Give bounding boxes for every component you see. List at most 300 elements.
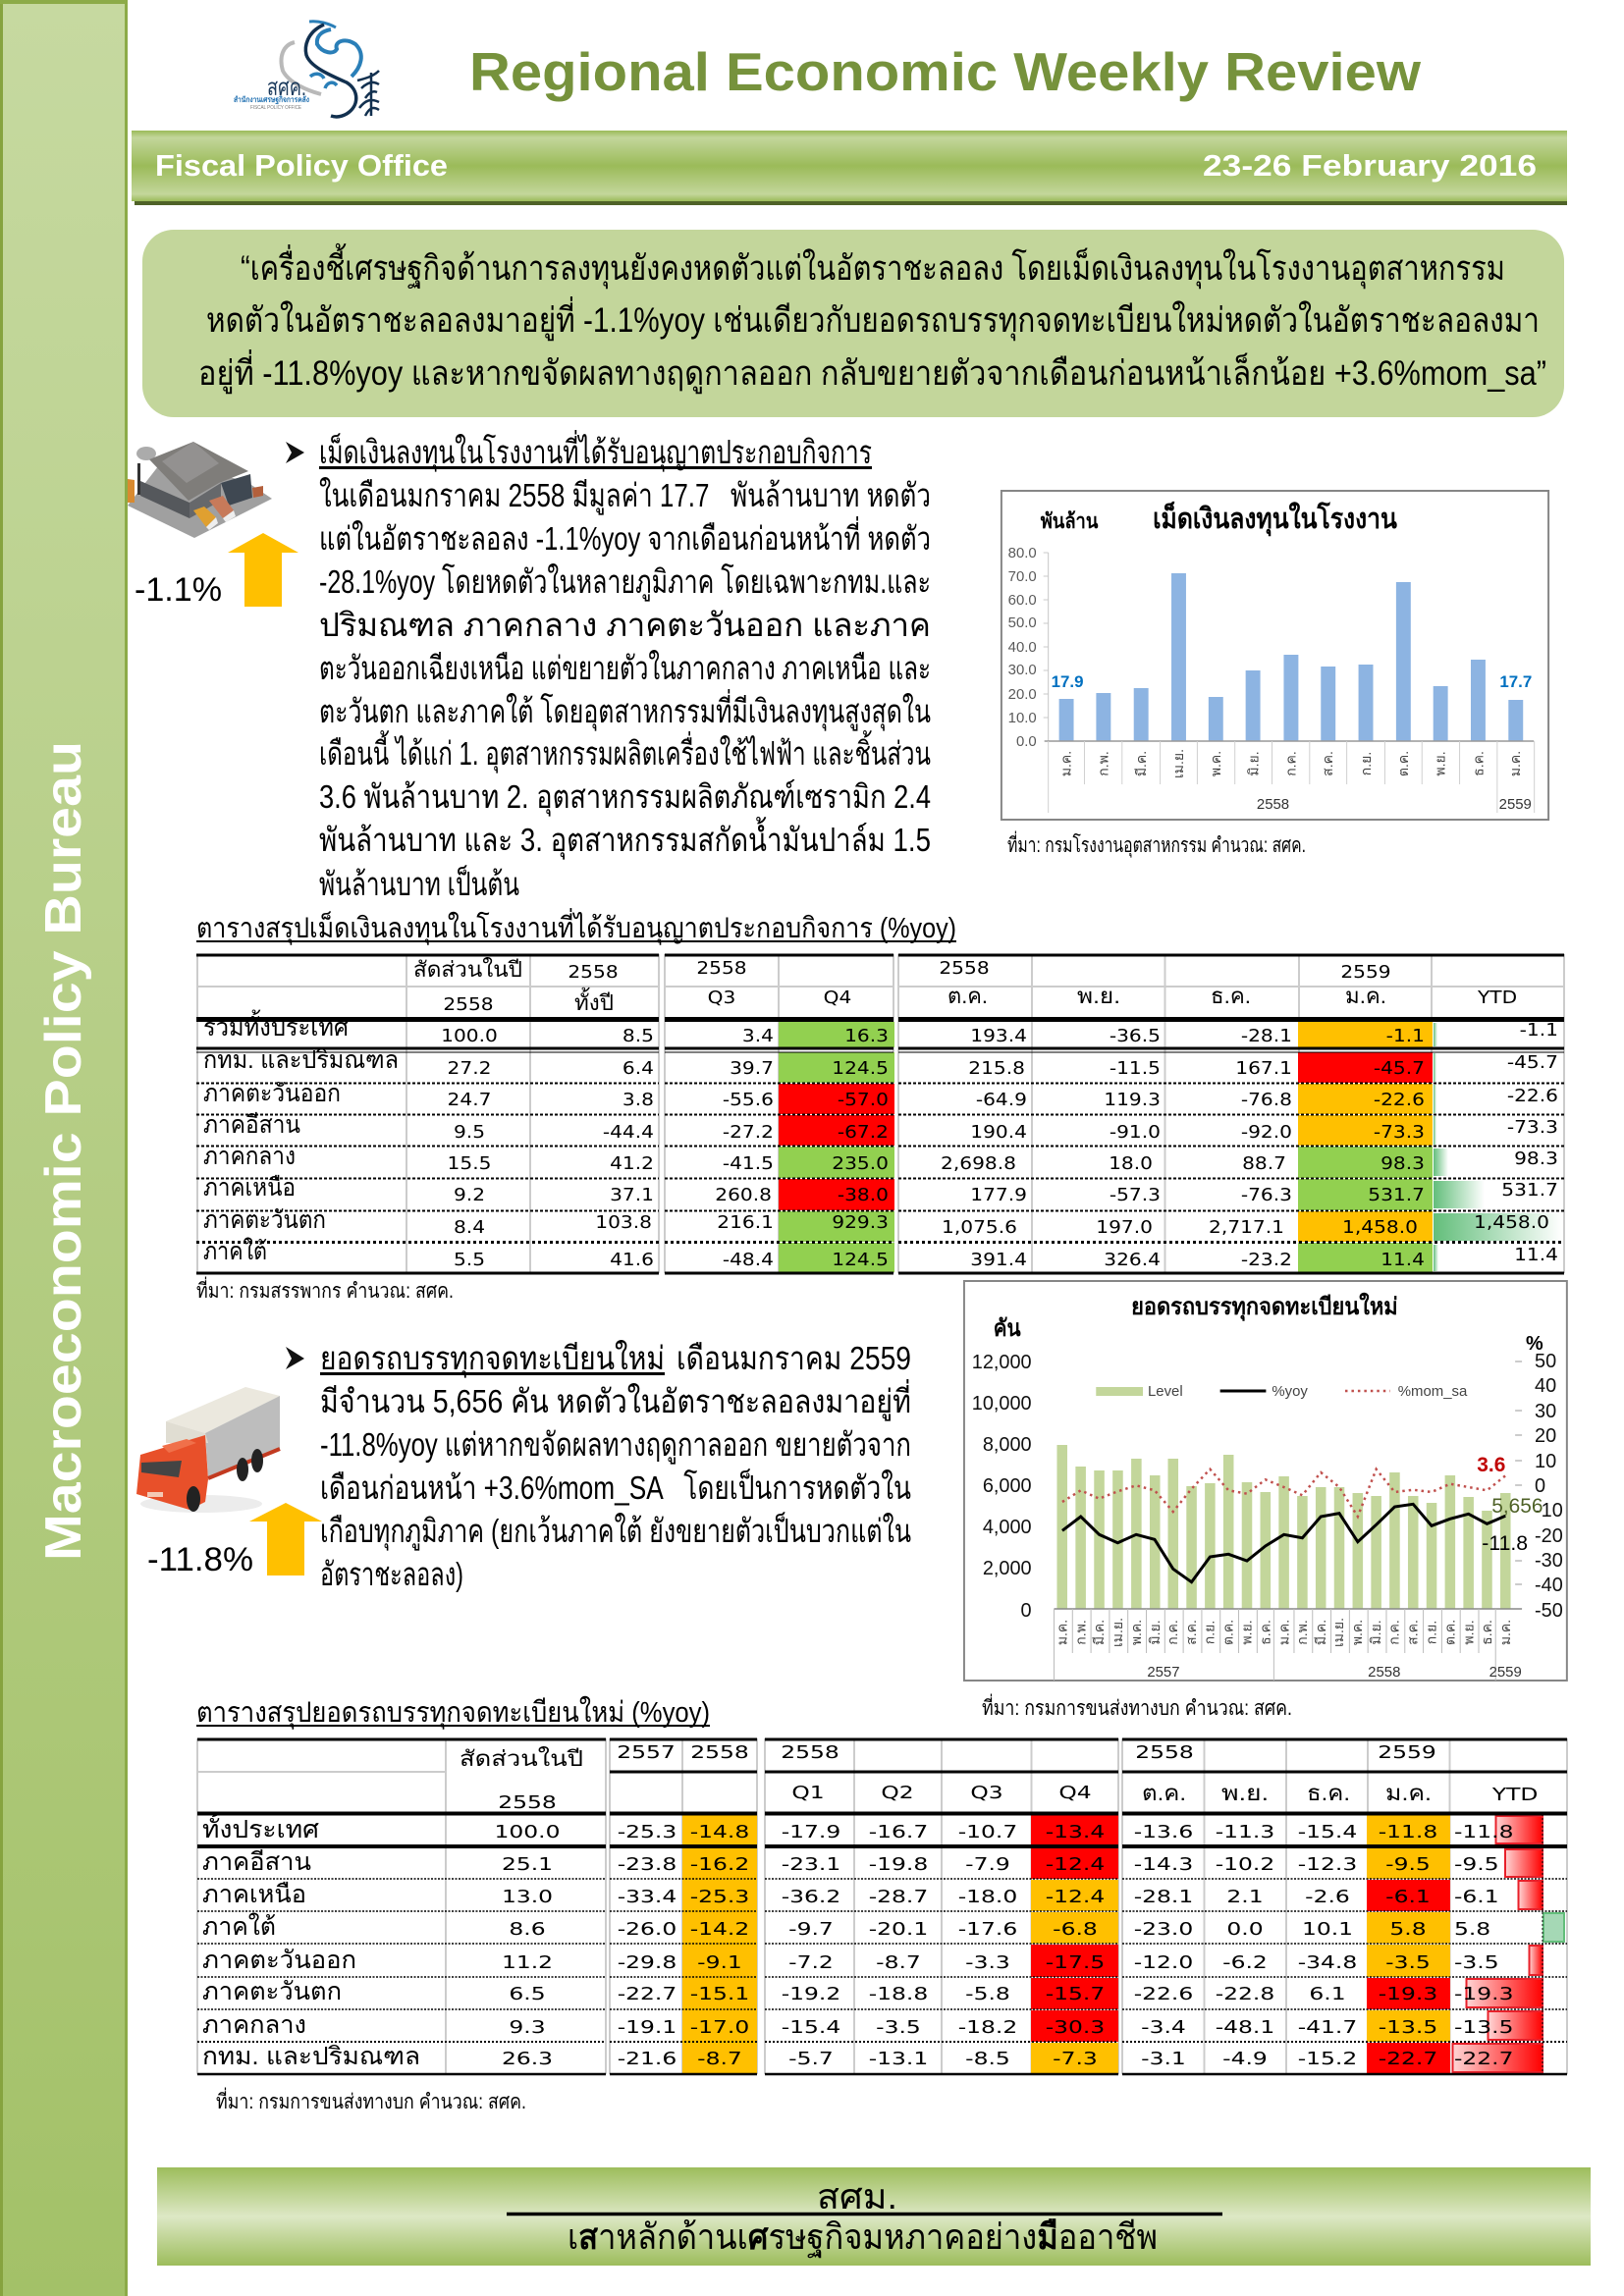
row: Central: 41.2 bbox=[610, 1152, 654, 1174]
row: West: 1,075.6 bbox=[942, 1216, 1017, 1238]
row: whole country: 3.4 bbox=[742, 1025, 774, 1046]
row: Central: -30.3 bbox=[1046, 2017, 1105, 2037]
row: South bbox=[203, 1237, 1558, 1270]
table 2 header: Q3 bbox=[970, 1783, 1003, 1802]
text: factory investment: พันล้านบาท และ 3. อุตสาหกรรมสกัดน้ำมันปาล์ม 1.5 bbox=[319, 817, 931, 860]
row: Central: -17.0 bbox=[690, 2017, 749, 2037]
row: whole country: 100.0 bbox=[441, 1025, 498, 1046]
table 2 header: 2558 bbox=[1135, 1742, 1194, 1762]
left axis: 8,000 bbox=[983, 1434, 1032, 1456]
row: West: 1,458.0 bbox=[1342, 1216, 1418, 1238]
row: whole country: ทั้งประเทศ bbox=[202, 1811, 319, 1843]
row: East: -3.3 bbox=[965, 1952, 1010, 1972]
x axis: ส.ค. bbox=[1320, 751, 1335, 776]
unit label: พันล้าน bbox=[1041, 509, 1099, 533]
y axis bbox=[1008, 545, 1049, 750]
x axis: ม.ค. bbox=[1497, 1620, 1513, 1645]
row: Central: -15.4 bbox=[782, 2017, 840, 2037]
row: Bangkok: -13.1 bbox=[869, 2049, 928, 2068]
x axis: ธ.ค. bbox=[1479, 1620, 1494, 1645]
date: 23-26 February 2016 bbox=[1203, 148, 1537, 183]
x axis: ก.พ. bbox=[1095, 751, 1110, 776]
row: Bangkok: -8.7 bbox=[697, 2049, 742, 2068]
row: Northeast: -9.5 bbox=[1385, 1854, 1431, 1874]
row: whole country: 16.3 bbox=[844, 1025, 889, 1046]
text: factory investment: 3.6 พันล้านบาท 2. อุตสาหกรรมผลิตภัณฑ์เซรามิก 2.4 bbox=[319, 778, 931, 817]
row: East: -3.5 bbox=[1385, 1952, 1431, 1972]
row: North bbox=[202, 1881, 1499, 1908]
table 1 header: Q3 bbox=[708, 987, 735, 1008]
row: West: -22.8 bbox=[1216, 1984, 1274, 2003]
y axis: 40.0 bbox=[1008, 639, 1037, 656]
x axis: พ.ย. bbox=[1239, 1620, 1254, 1645]
x axis: ม.ค. bbox=[1054, 1620, 1069, 1645]
table 2 header: 2558 bbox=[498, 1792, 557, 1812]
x axis: ก.ย. bbox=[1424, 1621, 1439, 1644]
table 2 header: 2557 bbox=[617, 1742, 676, 1762]
x axis: 2557 bbox=[1147, 1664, 1180, 1681]
row: West: 6.5 bbox=[509, 1984, 546, 2003]
row: Central: -3.5 bbox=[876, 2017, 921, 2037]
table 1 header: 2558 bbox=[568, 961, 619, 983]
row: East: -9.1 bbox=[697, 1952, 742, 1972]
x axis: ธ.ค. bbox=[1257, 1620, 1272, 1645]
right axis: 0 bbox=[1535, 1475, 1545, 1497]
row: East: -76.8 bbox=[1241, 1089, 1292, 1110]
row: Central: ภาคกลาง bbox=[203, 1143, 296, 1170]
row: North: -28.1 bbox=[1134, 1887, 1193, 1906]
row: whole country: -1.1 bbox=[1520, 1019, 1558, 1041]
row: Northeast: -91.0 bbox=[1110, 1121, 1161, 1143]
row: East: -12.0 bbox=[1134, 1952, 1193, 1972]
row: Northeast: ภาคอีสาน bbox=[203, 1111, 300, 1139]
table 1 header: สัดส่วนในปี bbox=[413, 957, 522, 982]
row: South: 5.8 bbox=[1389, 1919, 1427, 1939]
line: mom_sa bbox=[1062, 1469, 1505, 1517]
sidebar: Macroeconomic Policy Bureau bbox=[35, 741, 92, 1561]
text: factory investment bbox=[286, 430, 931, 902]
table 2 header: 2558 bbox=[781, 1742, 839, 1762]
row: East: -64.9 bbox=[976, 1089, 1027, 1110]
row: Bangkok: -7.3 bbox=[1053, 2049, 1098, 2068]
row: whole country: -28.1 bbox=[1241, 1025, 1292, 1046]
x axis: ธ.ค. bbox=[1470, 751, 1486, 776]
annotation: 5,656: 5,656 bbox=[1491, 1495, 1543, 1518]
row: Bangkok: -15.2 bbox=[1298, 2049, 1357, 2068]
row: East: 119.3 bbox=[1104, 1089, 1161, 1110]
row: Central bbox=[202, 2011, 1514, 2039]
x axis: เม.ย. bbox=[1330, 1618, 1346, 1647]
left unit: คัน bbox=[994, 1315, 1021, 1342]
x axis: ก.พ. bbox=[1072, 1620, 1088, 1645]
row: South: -14.2 bbox=[690, 1919, 749, 1939]
row: South: 326.4 bbox=[1104, 1249, 1161, 1270]
row: Bangkok: 39.7 bbox=[730, 1057, 774, 1079]
row: West: 197.0 bbox=[1096, 1216, 1153, 1238]
row: whole country: 100.0 bbox=[495, 1822, 560, 1842]
text: new truck registration: เกือบทุกภูมิภาค (ยกเว้นภาคใต้ ยังขยายตัวเป็นบวกแต่ใน bbox=[320, 1512, 911, 1551]
row: West bbox=[202, 1978, 1514, 2005]
chart title: ยอดรถบรรทุกจดทะเบียนใหม่ bbox=[1131, 1292, 1398, 1321]
row: whole country: -15.4 bbox=[1298, 1822, 1357, 1842]
table 1 header: 2558 bbox=[939, 957, 990, 979]
row: West: -22.7 bbox=[618, 1984, 677, 2003]
table 2: new truck registration bbox=[197, 1738, 1567, 2074]
table 2 header: ต.ค. bbox=[1142, 1781, 1186, 1805]
row: Bangkok bbox=[202, 2043, 1514, 2070]
row: South: -6.8 bbox=[1053, 1919, 1098, 1939]
x axis: 2559 bbox=[1499, 796, 1532, 813]
table 2 header: 2559 bbox=[1378, 1742, 1436, 1762]
right axis: -50 bbox=[1535, 1600, 1563, 1622]
row: South: -20.1 bbox=[869, 1919, 928, 1939]
row: South: -23.0 bbox=[1134, 1919, 1193, 1939]
x axis: 2558 bbox=[1368, 1664, 1400, 1681]
source: chart 2: ที่มา: กรมการขนส่งทางบก คำนวณ: สศค. bbox=[982, 1693, 1292, 1720]
row: North: -6.1 bbox=[1454, 1887, 1499, 1906]
x axis: ก.ค. bbox=[1386, 1620, 1402, 1645]
row: South: 8.6 bbox=[509, 1919, 546, 1939]
row: Bangkok: 6.4 bbox=[623, 1057, 654, 1079]
row: whole country: รวมทั้งประเทศ bbox=[203, 1009, 349, 1041]
left axis: 10,000 bbox=[972, 1393, 1032, 1415]
row: West: ภาคตะวันตก bbox=[203, 1206, 326, 1234]
value: -11.8%: -11.8% bbox=[147, 1541, 253, 1578]
text: factory investment: แต่ในอัตราชะลอลง -1.1%yoy จากเดือนก่อนหน้าที่ หดตัว bbox=[319, 516, 931, 557]
row: East bbox=[202, 1947, 1499, 1974]
x axis: เม.ย. bbox=[1170, 749, 1186, 778]
row: Northeast: ภาคอีสาน bbox=[202, 1848, 311, 1876]
text: new truck registration: -11.8%yoy แต่หากขจัดผลทางฤดูกาลออก ขยายตัวจาก bbox=[320, 1426, 911, 1465]
icon: factory bbox=[128, 442, 272, 538]
x axis: 2559 bbox=[1489, 1664, 1522, 1681]
text: factory investment: พันล้านบาท เป็นต้น bbox=[319, 865, 519, 902]
row: Bangkok: 124.5 bbox=[832, 1057, 889, 1079]
bars: level bbox=[1056, 1445, 1511, 1609]
row: Northeast: -44.4 bbox=[603, 1121, 654, 1143]
row: East: -8.7 bbox=[876, 1952, 921, 1972]
row: North: 260.8 bbox=[715, 1184, 772, 1205]
row: West: -19.2 bbox=[782, 1984, 840, 2003]
row: Bangkok: -45.7 bbox=[1374, 1057, 1425, 1079]
row: whole country: -1.1 bbox=[1386, 1025, 1425, 1046]
data label: 17.9: 17.9 bbox=[1052, 672, 1084, 691]
row: East: 3.8 bbox=[623, 1089, 654, 1110]
x axis: พ.ย. bbox=[1433, 751, 1448, 776]
row: Northeast: -9.5 bbox=[1454, 1854, 1499, 1874]
row: South: 391.4 bbox=[970, 1249, 1027, 1270]
row: whole country: -11.8 bbox=[1454, 1822, 1514, 1842]
x axis: พ.ค. bbox=[1128, 1620, 1144, 1645]
x axis: มิ.ย. bbox=[1147, 1620, 1163, 1645]
table 1 header: พ.ย. bbox=[1077, 984, 1120, 1008]
row: Bangkok: -22.7 bbox=[1454, 2049, 1514, 2068]
y axis: 50.0 bbox=[1008, 614, 1037, 631]
text: factory investment: ในเดือนมกราคม 2558 มีมูลค่า 17.7 พันล้านบาท หดตัว bbox=[319, 477, 931, 515]
YTD data bars bbox=[1434, 1023, 1562, 1271]
table 2 header bbox=[460, 1742, 1538, 1812]
row: East bbox=[203, 1080, 1558, 1110]
row: North: -12.4 bbox=[1046, 1887, 1105, 1906]
row: Central: -13.5 bbox=[1379, 2017, 1437, 2037]
row: South: -26.0 bbox=[618, 1919, 677, 1939]
row: West: 216.1 bbox=[717, 1211, 774, 1233]
title: Regional Economic Weekly Review bbox=[469, 41, 1421, 102]
text: new truck registration: มีจำนวน 5,656 คัน หดตัวในอัตราชะลอลงมาอยู่ที่ bbox=[320, 1379, 911, 1421]
row: South: 10.1 bbox=[1302, 1919, 1353, 1939]
x axis: ต.ค. bbox=[1395, 751, 1411, 776]
arrow: investment up bbox=[228, 533, 298, 607]
row: Central: 98.3 bbox=[1380, 1152, 1425, 1174]
row: South: 41.6 bbox=[610, 1249, 654, 1270]
row: whole country: -25.3 bbox=[618, 1822, 677, 1842]
right axis bbox=[1515, 1351, 1563, 1622]
row: East: -22.6 bbox=[1507, 1085, 1558, 1106]
right axis: 50 bbox=[1535, 1351, 1556, 1372]
row: Northeast: -7.9 bbox=[965, 1854, 1010, 1874]
row: West: ภาคตะวันตก bbox=[202, 1978, 342, 2005]
row: Northeast: -73.3 bbox=[1374, 1121, 1425, 1143]
x axis: พ.ย. bbox=[1460, 1620, 1476, 1645]
x axis: ม.ค. bbox=[1507, 751, 1523, 776]
x axis: 2558 bbox=[1257, 796, 1289, 813]
row: whole country: 193.4 bbox=[970, 1025, 1027, 1046]
row: Bangkok: -11.5 bbox=[1110, 1057, 1161, 1079]
table 1 header: YTD bbox=[1477, 987, 1517, 1008]
text: new truck registration: ยอดรถบรรทุกจดทะเบียนใหม่ bbox=[320, 1340, 665, 1378]
x axis: ส.ค. bbox=[1183, 1620, 1199, 1645]
row: Northeast bbox=[202, 1848, 1499, 1876]
x axis: ม.ค. bbox=[1058, 751, 1074, 776]
row: Bangkok: 167.1 bbox=[1235, 1057, 1292, 1079]
row: Central: -19.1 bbox=[618, 2017, 677, 2037]
table 2 header: Q4 bbox=[1058, 1783, 1092, 1802]
x axis: มิ.ย. bbox=[1246, 751, 1262, 776]
row: South: ภาคใต้ bbox=[202, 1912, 276, 1941]
table 2 header: YTD bbox=[1491, 1785, 1538, 1804]
row: Northeast: -12.3 bbox=[1298, 1854, 1357, 1874]
row: Bangkok: -4.9 bbox=[1222, 2049, 1268, 2068]
table 1 header: ต.ค. bbox=[947, 984, 988, 1008]
x axis: มี.ค. bbox=[1133, 751, 1149, 776]
row: Central: 9.3 bbox=[509, 2017, 546, 2037]
row: North bbox=[203, 1174, 1558, 1205]
row: East: -34.8 bbox=[1298, 1952, 1357, 1972]
row: North: 9.2 bbox=[454, 1184, 485, 1205]
table 1 header: ทั้งปี bbox=[574, 988, 614, 1015]
row: Central bbox=[203, 1143, 1558, 1174]
row: Bangkok: -3.1 bbox=[1141, 2049, 1186, 2068]
right unit: % bbox=[1526, 1333, 1543, 1355]
x axis: พ.ค. bbox=[1208, 751, 1223, 776]
right axis: 30 bbox=[1535, 1401, 1556, 1422]
text: new truck registration: เดือนมกราคม 2559 bbox=[677, 1340, 911, 1376]
x axis: ต.ค. bbox=[1220, 1620, 1236, 1645]
footer abbreviation: สศม. bbox=[817, 2176, 897, 2216]
annotation: -11.8: -11.8 bbox=[1482, 1532, 1528, 1555]
row: South bbox=[202, 1912, 1490, 1941]
y axis: 70.0 bbox=[1008, 568, 1037, 585]
x axis bbox=[1054, 1609, 1522, 1681]
right axis: -10 bbox=[1535, 1500, 1563, 1522]
table 1: factory investment bbox=[196, 954, 1564, 1273]
text: factory investment: -28.1%yoy โดยหดตัวในหลายภูมิภาค โดยเฉพาะกทม.และ bbox=[319, 563, 931, 602]
row: East: -7.2 bbox=[788, 1952, 834, 1972]
row: Northeast: 9.5 bbox=[454, 1121, 485, 1143]
x axis bbox=[1045, 741, 1535, 813]
row: Northeast: 25.1 bbox=[502, 1854, 553, 1874]
row: Northeast: -14.3 bbox=[1134, 1854, 1193, 1874]
text: new truck registration: เดือนก่อนหน้า +3.6%mom_SA โดยเป็นการหดตัวใน bbox=[320, 1468, 911, 1506]
row: West: 103.8 bbox=[595, 1211, 652, 1233]
row: Central: -3.4 bbox=[1141, 2017, 1186, 2037]
footer slogan: เสาหลักด้านเศรษฐกิจมหภาคอย่างมืออาชีพ bbox=[568, 2216, 1158, 2259]
table 2 heading: ตารางสรุปยอดรถบรรทุกจดทะเบียนใหม่ (%yoy) bbox=[196, 1695, 710, 1730]
row: Bangkok: -5.7 bbox=[788, 2049, 834, 2068]
row: North: -6.1 bbox=[1385, 1887, 1431, 1906]
row: South: -23.2 bbox=[1241, 1249, 1292, 1270]
right axis: -20 bbox=[1535, 1525, 1563, 1547]
table 2 header: พ.ย. bbox=[1221, 1781, 1269, 1805]
row: whole country: -11.3 bbox=[1216, 1822, 1274, 1842]
row: North: -36.2 bbox=[782, 1887, 840, 1906]
row: Central: 18.0 bbox=[1109, 1152, 1153, 1174]
row: whole country: -13.6 bbox=[1134, 1822, 1193, 1842]
legend: Level bbox=[1148, 1383, 1183, 1400]
text: new truck registration bbox=[286, 1340, 911, 1592]
x axis: ส.ค. bbox=[1405, 1620, 1421, 1645]
source: chart 1: ที่มา: กรมโรงงานอุตสาหกรรม คำนวณ: สศค. bbox=[1007, 830, 1306, 858]
2558 highlight cells bbox=[682, 1814, 757, 2074]
row: West: -18.8 bbox=[869, 1984, 928, 2003]
text: factory investment: ปริมณฑล ภาคกลาง ภาคตะวันออก และภาค bbox=[319, 607, 931, 643]
row: West: 1,458.0 bbox=[1474, 1211, 1549, 1233]
row: whole country: -11.8 bbox=[1379, 1822, 1437, 1842]
y axis: 30.0 bbox=[1008, 662, 1037, 678]
right axis: 40 bbox=[1535, 1375, 1556, 1397]
y axis: 20.0 bbox=[1008, 686, 1037, 703]
row: North: -33.4 bbox=[618, 1887, 677, 1906]
x axis: ก.ค. bbox=[1282, 751, 1298, 776]
text: factory investment: ตะวันออกเฉียงเหนือ แต่ขยายตัวในภาคกลาง ภาคเหนือ และ bbox=[319, 650, 931, 686]
row: East: -3.5 bbox=[1454, 1952, 1499, 1972]
row: West: 6.1 bbox=[1309, 1984, 1346, 2003]
row: West: -15.7 bbox=[1046, 1984, 1105, 2003]
row: East: -17.5 bbox=[1046, 1952, 1105, 1972]
row: West: -22.6 bbox=[1134, 1984, 1193, 2003]
row: North: -38.0 bbox=[838, 1184, 889, 1205]
annotation: 3.6: 3.6 bbox=[1477, 1454, 1505, 1476]
row: East: -29.8 bbox=[618, 1952, 677, 1972]
row: North: 2.1 bbox=[1226, 1887, 1264, 1906]
table 1 header: ม.ค. bbox=[1345, 984, 1386, 1008]
row: Bangkok: -21.6 bbox=[618, 2049, 677, 2068]
y axis: 0.0 bbox=[1016, 733, 1037, 750]
January highlight cells bbox=[1298, 1022, 1433, 1272]
row: Central: ภาคกลาง bbox=[202, 2011, 306, 2039]
right axis: 10 bbox=[1535, 1451, 1556, 1472]
row: West: 929.3 bbox=[832, 1211, 889, 1233]
row: North: 177.9 bbox=[970, 1184, 1027, 1205]
left axis bbox=[972, 1352, 1032, 1622]
right axis: -40 bbox=[1535, 1575, 1563, 1596]
logo: สำนักงานเศรษฐกิจการคลัง bbox=[234, 95, 309, 105]
header bar bbox=[132, 131, 1567, 205]
row: South: -9.7 bbox=[788, 1919, 834, 1939]
table 1 header bbox=[413, 957, 1517, 1015]
table 2 header: 2558 bbox=[690, 1742, 749, 1762]
table 1 header: ธ.ค. bbox=[1211, 984, 1251, 1008]
table 1 header: 2558 bbox=[443, 993, 494, 1015]
x axis: ก.ย. bbox=[1358, 752, 1374, 775]
row: North: -28.7 bbox=[869, 1887, 928, 1906]
row: Northeast: -27.2 bbox=[723, 1121, 774, 1143]
row: West: 2,717.1 bbox=[1209, 1216, 1284, 1238]
row: East: ภาคตะวันออก bbox=[202, 1947, 356, 1974]
row: whole country: 8.5 bbox=[623, 1025, 654, 1046]
row: Northeast: -10.2 bbox=[1216, 1854, 1274, 1874]
row: North: -2.6 bbox=[1305, 1887, 1350, 1906]
row: South: 124.5 bbox=[832, 1249, 889, 1270]
row: West: -15.1 bbox=[690, 1984, 749, 2003]
icon: truck bbox=[136, 1387, 280, 1513]
left axis: 6,000 bbox=[983, 1475, 1032, 1497]
x axis: มี.ค. bbox=[1313, 1620, 1328, 1645]
row: Northeast: -23.8 bbox=[618, 1854, 677, 1874]
y axis: 10.0 bbox=[1008, 710, 1037, 726]
row: whole country: -16.7 bbox=[869, 1822, 928, 1842]
row: whole country: -10.7 bbox=[958, 1822, 1017, 1842]
row: Central: 235.0 bbox=[832, 1152, 889, 1174]
row: Bangkok: -8.5 bbox=[965, 2049, 1010, 2068]
office name: Fiscal Policy Office bbox=[155, 148, 448, 183]
table 2 header: ม.ค. bbox=[1385, 1781, 1432, 1805]
source: table 2: ที่มา: กรมการขนส่งทางบก คำนวณ: สศค. bbox=[216, 2087, 526, 2113]
Q4 highlight cells bbox=[1031, 1815, 1118, 2074]
row: whole country bbox=[203, 1009, 1558, 1046]
legend bbox=[1096, 1383, 1468, 1400]
row: Bangkok: กทม. และปริมณฑล bbox=[203, 1046, 399, 1074]
x axis: ก.ย. bbox=[1202, 1621, 1218, 1644]
row: Central: -13.5 bbox=[1454, 2017, 1514, 2037]
x axis: มิ.ย. bbox=[1368, 1620, 1383, 1645]
row: North: 531.7 bbox=[1368, 1184, 1425, 1205]
right axis: 20 bbox=[1535, 1425, 1556, 1447]
row: Central: 98.3 bbox=[1514, 1148, 1558, 1169]
row: whole country: -14.8 bbox=[690, 1822, 749, 1842]
chart: new truck registration bbox=[964, 1281, 1567, 1681]
table 1 heading: ตารางสรุปเม็ดเงินลงทุนในโรงงานที่ได้รับอนุญาตประกอบกิจการ (%yoy) bbox=[196, 908, 956, 945]
row: Northeast bbox=[203, 1111, 1558, 1143]
row: East: -22.6 bbox=[1374, 1089, 1425, 1110]
row: West bbox=[203, 1206, 1549, 1238]
row: Northeast: -67.2 bbox=[838, 1121, 889, 1143]
row: South: 0.0 bbox=[1226, 1919, 1264, 1939]
left axis: 12,000 bbox=[972, 1352, 1032, 1373]
table 2 header: ธ.ค. bbox=[1307, 1781, 1350, 1805]
footer band bbox=[157, 2167, 1591, 2266]
row: Northeast: -92.0 bbox=[1241, 1121, 1292, 1143]
row: South: 11.4 bbox=[1514, 1244, 1558, 1265]
line: yoy bbox=[1062, 1504, 1505, 1582]
right axis: -30 bbox=[1535, 1550, 1563, 1572]
legend: %yoy bbox=[1272, 1383, 1308, 1400]
row: North: -76.3 bbox=[1241, 1184, 1292, 1205]
left axis: 4,000 bbox=[983, 1517, 1032, 1538]
sidebar bbox=[0, 0, 128, 2296]
x axis: เม.ย. bbox=[1110, 1618, 1125, 1647]
value: -1.1%: -1.1% bbox=[135, 571, 222, 609]
